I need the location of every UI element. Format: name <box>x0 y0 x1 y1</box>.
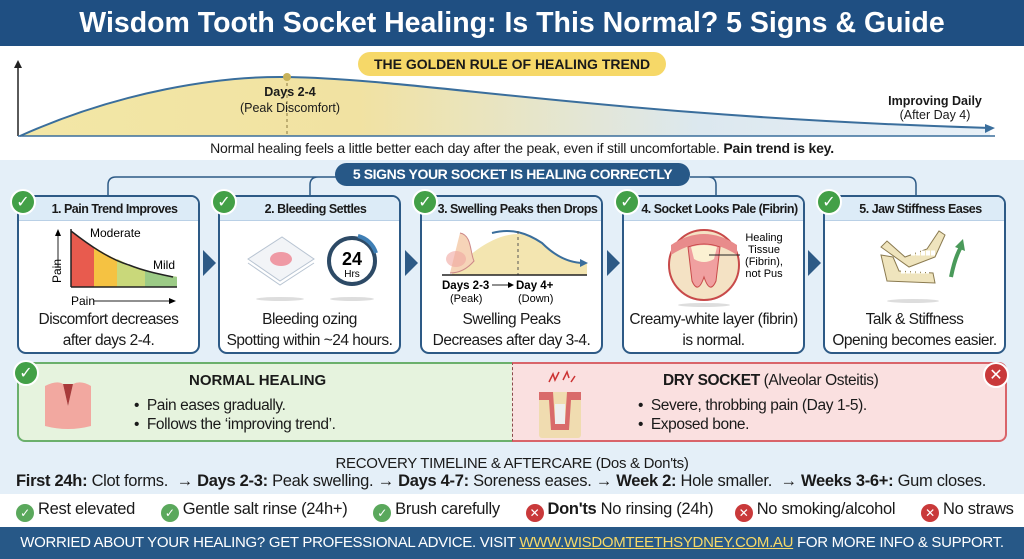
golden rule label: THE GOLDEN RULE OF HEALING TREND <box>374 56 650 72</box>
icon: socket <box>668 229 783 307</box>
timeline: RECOVERY TIMELINE & AFTERCARE (Dos & Don'ts) <box>335 455 689 472</box>
peak label <box>240 85 340 115</box>
panel: normal healing <box>17 362 513 442</box>
card 5: Talk & Stiffness <box>866 311 963 328</box>
improving label <box>888 94 982 122</box>
icon: gauze and clock <box>247 234 378 301</box>
text: ✓ <box>620 192 634 211</box>
card 2: Spotting within ~24 hours. <box>227 332 392 349</box>
golden rule label <box>358 52 666 76</box>
card 4 <box>622 195 805 354</box>
card 2: 2. Bleeding Settles <box>265 202 366 216</box>
card 5: 5. Jaw Stiffness Eases <box>859 202 982 216</box>
dos and donts: ✓ <box>377 506 387 520</box>
pain chart <box>50 226 177 307</box>
dos and donts: ✕ <box>739 506 749 520</box>
dos and donts: Rest elevated Gentle salt rinse (24h+) Brush carefully Don'ts No rinsing (24h) No smoking/alcohol No straws <box>38 500 1014 518</box>
card 4: 4. Socket Looks Pale (Fibrin) <box>641 202 798 216</box>
panel: dry socket: • Severe, throbbing pain (Day 1-5). <box>638 397 867 414</box>
card 1: Discomfort decreases <box>39 311 178 328</box>
peak label: (Peak Discomfort) <box>240 101 340 115</box>
dos and donts: ✕ <box>925 506 935 520</box>
text: ✓ <box>19 363 33 382</box>
signs banner: 5 SIGNS YOUR SOCKET IS HEALING CORRECTLY <box>353 166 672 182</box>
icon: socket: (Fibrin), <box>745 256 783 268</box>
trend caption: Normal healing feels a little better each day after the peak, even if still uncomfortable. Pain trend is key. <box>210 140 834 156</box>
swelling chart: (Peak) <box>450 293 482 305</box>
card 3: 3. Swelling Peaks then Drops <box>438 202 597 216</box>
card 5 <box>823 195 1006 354</box>
card 2 <box>218 195 401 354</box>
card 1 <box>17 195 200 354</box>
icon: socket: Healing <box>745 232 783 244</box>
signs banner <box>335 163 690 186</box>
card 1: after days 2-4. <box>63 332 154 349</box>
icon: gauze and clock: 24 <box>342 249 362 269</box>
icon: jaw <box>880 230 965 303</box>
icon: gum <box>45 382 91 429</box>
dos and donts: ✓ <box>20 506 30 520</box>
panel: normal healing: • Pain eases gradually. <box>134 397 286 414</box>
icon: socket: Tissue <box>748 244 780 256</box>
dos and donts: ✓ <box>165 506 175 520</box>
pain chart: Pain <box>50 259 64 283</box>
footer <box>0 527 1024 559</box>
timeline <box>0 450 1024 494</box>
card 3: Decreases after day 3-4. <box>433 332 590 349</box>
arrows <box>203 250 216 276</box>
panel: normal healing: • Follows the ‘improving trend’. <box>134 416 336 433</box>
signs section <box>0 160 1024 450</box>
connector lines <box>107 176 917 195</box>
text: ✓ <box>418 192 432 211</box>
title bar <box>0 0 1024 46</box>
text: ✓ <box>217 192 231 211</box>
card 4: Creamy-white layer (fibrin) <box>629 311 798 328</box>
panel: dry socket <box>512 362 1007 442</box>
peak label: Days 2-4 <box>264 85 316 99</box>
panel: dry socket: • Exposed bone. <box>638 416 749 433</box>
footer: WORRIED ABOUT YOUR HEALING? GET PROFESSIONAL ADVICE. VISIT WWW.WISDOMTEETHSYDNEY.COM.AU FOR MORE INFO & SUPPORT. <box>20 534 1004 551</box>
icon: gauze and clock: Hrs <box>344 269 360 280</box>
improving label: Improving Daily <box>888 94 982 108</box>
card 3 <box>420 195 603 354</box>
swelling chart <box>442 230 588 305</box>
trend chart <box>14 60 995 137</box>
title bar: Wisdom Tooth Socket Healing: Is This Normal? 5 Signs & Guide <box>79 7 945 39</box>
text: ✓ <box>822 192 836 211</box>
card 2: Bleeding ozing <box>262 311 357 328</box>
icon: socket: not Pus <box>745 268 783 280</box>
checks: ✓ <box>16 192 30 211</box>
text: ✕ <box>989 365 1003 384</box>
improving label: (After Day 4) <box>900 108 970 122</box>
card 1: 1. Pain Trend Improves <box>52 202 177 216</box>
pain chart: Moderate <box>90 226 141 240</box>
checks <box>10 189 36 215</box>
panel: normal healing: NORMAL HEALING <box>189 372 326 389</box>
swelling chart: (Down) <box>518 293 553 305</box>
card 3: Swelling Peaks <box>462 311 561 328</box>
swelling chart: Day 4+ <box>516 280 554 292</box>
pain chart: Mild <box>153 258 175 272</box>
panel: dry socket: DRY SOCKET (Alveolar Osteitis) <box>663 372 878 389</box>
card 5: Opening becomes easier. <box>832 332 997 349</box>
dos and donts: ✕ <box>530 506 539 520</box>
icon: dry socket <box>539 370 581 438</box>
card 4: is normal. <box>682 332 745 349</box>
timeline: First 24h: Clot forms. → Days 2-3: Peak swelling. → Days 4-7: Soreness eases. → Week 2: Hole smaller. → Weeks 3-6+: Gum closes. <box>16 472 986 490</box>
swelling chart: Days 2-3 <box>442 280 489 292</box>
